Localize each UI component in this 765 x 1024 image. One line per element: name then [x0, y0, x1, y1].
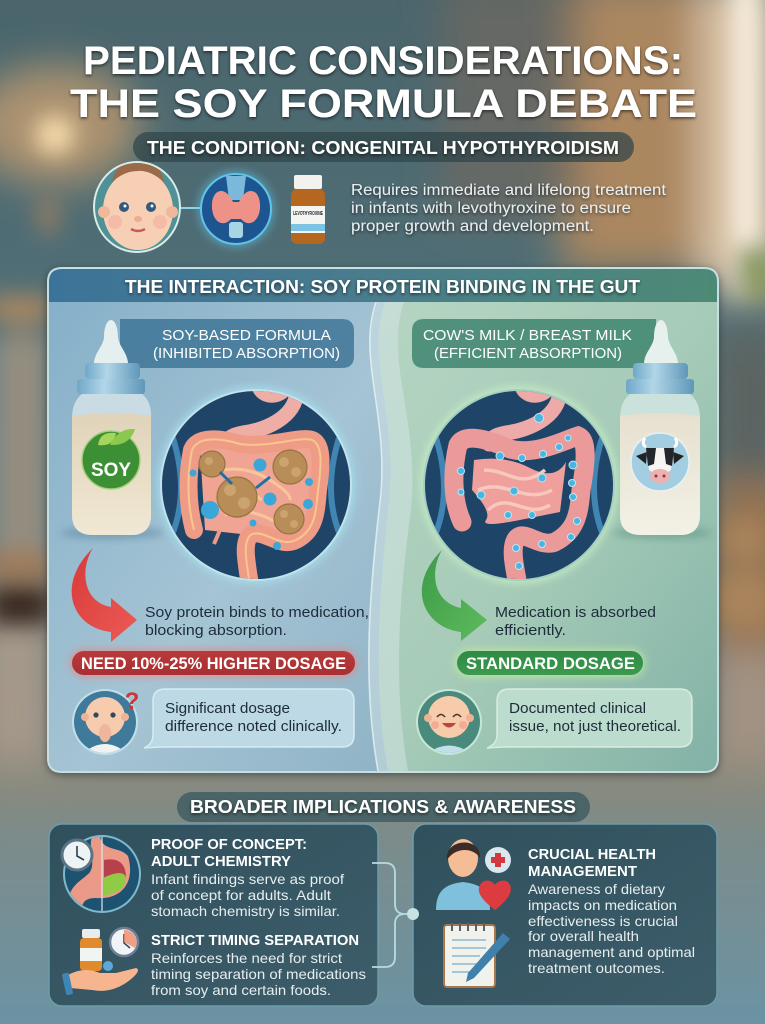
icon: happy baby [416, 689, 482, 756]
arrow: green curved [422, 550, 487, 641]
right side: milk background [379, 302, 717, 771]
health management text: MANAGEMENT [528, 864, 637, 880]
implications heading: BROADER IMPLICATIONS & AWARENESS [190, 797, 576, 817]
icon: soy badge [82, 429, 140, 489]
condition description: Requires immediate and lifelong treatment [351, 182, 667, 199]
panel header [49, 269, 717, 302]
health management text: effectiveness is crucial [528, 913, 678, 929]
icon: soy bottle [60, 320, 164, 539]
panel base [48, 268, 718, 772]
implications heading [177, 792, 590, 822]
connector line [180, 207, 204, 209]
speech bubble: milk note: issue, not just theoretical. [509, 718, 681, 735]
milk formula label: (EFFICIENT ABSORPTION) [434, 345, 622, 362]
health management text: impacts on medication [528, 897, 677, 913]
arrow: red curved [72, 548, 137, 642]
icon: milk bottle [612, 320, 712, 539]
soy formula label: SOY-BASED FORMULA [162, 327, 331, 344]
speech bubble: soy note: difference noted clinically. [165, 718, 342, 735]
soy formula label [120, 319, 354, 368]
icon: baby face [93, 160, 181, 253]
icon: notepad and pen [444, 923, 510, 987]
title [70, 39, 697, 126]
left side: soy background [49, 302, 391, 771]
medication particles [190, 458, 313, 550]
health management text: treatment outcomes. [528, 960, 665, 976]
icon: soy badge: SOY [91, 460, 131, 481]
proof of concept text: ADULT CHEMISTRY [151, 854, 291, 870]
panel header: THE INTERACTION: SOY PROTEIN BINDING IN THE GUT [125, 277, 640, 297]
soy formula label: (INHIBITED ABSORPTION) [153, 345, 340, 362]
condition description: proper growth and development. [351, 218, 594, 235]
callout: standard dosage [455, 649, 645, 677]
callout: standard dosage: STANDARD DOSAGE [466, 654, 635, 673]
health management text: CRUCIAL HEALTH [528, 847, 656, 863]
soy explanation text: Soy protein binds to medication, [145, 604, 369, 621]
milk explanation text [495, 604, 656, 639]
health management text: for overall health [528, 928, 639, 944]
strict timing text: Reinforces the need for strict [151, 950, 342, 966]
icon: stomach with clock [62, 835, 141, 915]
icon: levothyroxine bottle: LEVOTHYROXINE [293, 211, 323, 217]
soy explanation text [145, 604, 369, 639]
strict timing text [151, 933, 366, 998]
title: THE SOY FORMULA DEBATE [70, 82, 697, 126]
icon: levothyroxine bottle [291, 175, 325, 244]
panel: crucial health management [413, 824, 717, 1006]
condition heading: THE CONDITION: CONGENITAL HYPOTHYROIDISM [147, 138, 619, 158]
condition description: in infants with levothyroxine to ensure [351, 200, 631, 217]
speech bubble: milk note: Documented clinical [509, 700, 646, 717]
connector bracket [372, 863, 419, 967]
speech bubble: soy note [144, 689, 354, 748]
icon: cow badge [631, 433, 689, 491]
chart: milk gut illustration [420, 384, 618, 585]
section: broader implications [49, 792, 717, 1006]
health management text: management and optimal [528, 944, 695, 960]
condition description [351, 182, 667, 235]
milk formula label [412, 319, 656, 368]
condition heading [133, 132, 634, 162]
proof of concept text: stomach chemistry is similar. [151, 903, 340, 919]
icon: doctor with heart [436, 839, 511, 910]
chart: soy gut illustration [157, 384, 355, 585]
proof of concept text: of concept for adults. Adult [151, 887, 331, 903]
strict timing text: STRICT TIMING SEPARATION [151, 933, 359, 949]
panel: the interaction [48, 268, 718, 772]
soy explanation text: blocking absorption. [145, 622, 287, 639]
icon: confused baby: ? [125, 688, 139, 715]
wave divider [369, 302, 412, 771]
proof of concept text [151, 837, 344, 919]
speech bubble: soy note: Significant dosage [165, 700, 290, 717]
proof of concept text: Infant findings serve as proof [151, 871, 344, 887]
medication particles absorbed [458, 414, 580, 570]
callout: higher dosage [70, 649, 357, 677]
strict timing text: from soy and certain foods. [151, 982, 331, 998]
strict timing text: timing separation of medications [151, 966, 366, 982]
panel: adult chemistry and timing [49, 824, 378, 1006]
health management text [528, 847, 695, 976]
title: PEDIATRIC CONSIDERATIONS: [83, 39, 683, 83]
milk explanation text: Medication is absorbed [495, 604, 656, 621]
binding arrows [220, 472, 270, 488]
icon: confused baby [72, 688, 139, 756]
callout: higher dosage: NEED 10%-25% HIGHER DOSAGE [81, 654, 346, 673]
icon: thyroid gland [197, 170, 275, 248]
milk formula label: COW'S MILK / BREAST MILK [423, 327, 632, 344]
proof of concept text: PROOF OF CONCEPT: [151, 837, 307, 853]
health management text: Awareness of dietary [528, 881, 665, 897]
speech bubble: milk note [487, 689, 692, 748]
icon: medication in hand with clock [62, 928, 138, 995]
soy protein clumps [199, 450, 307, 534]
section: the condition [93, 132, 667, 253]
milk explanation text: efficiently. [495, 622, 566, 639]
